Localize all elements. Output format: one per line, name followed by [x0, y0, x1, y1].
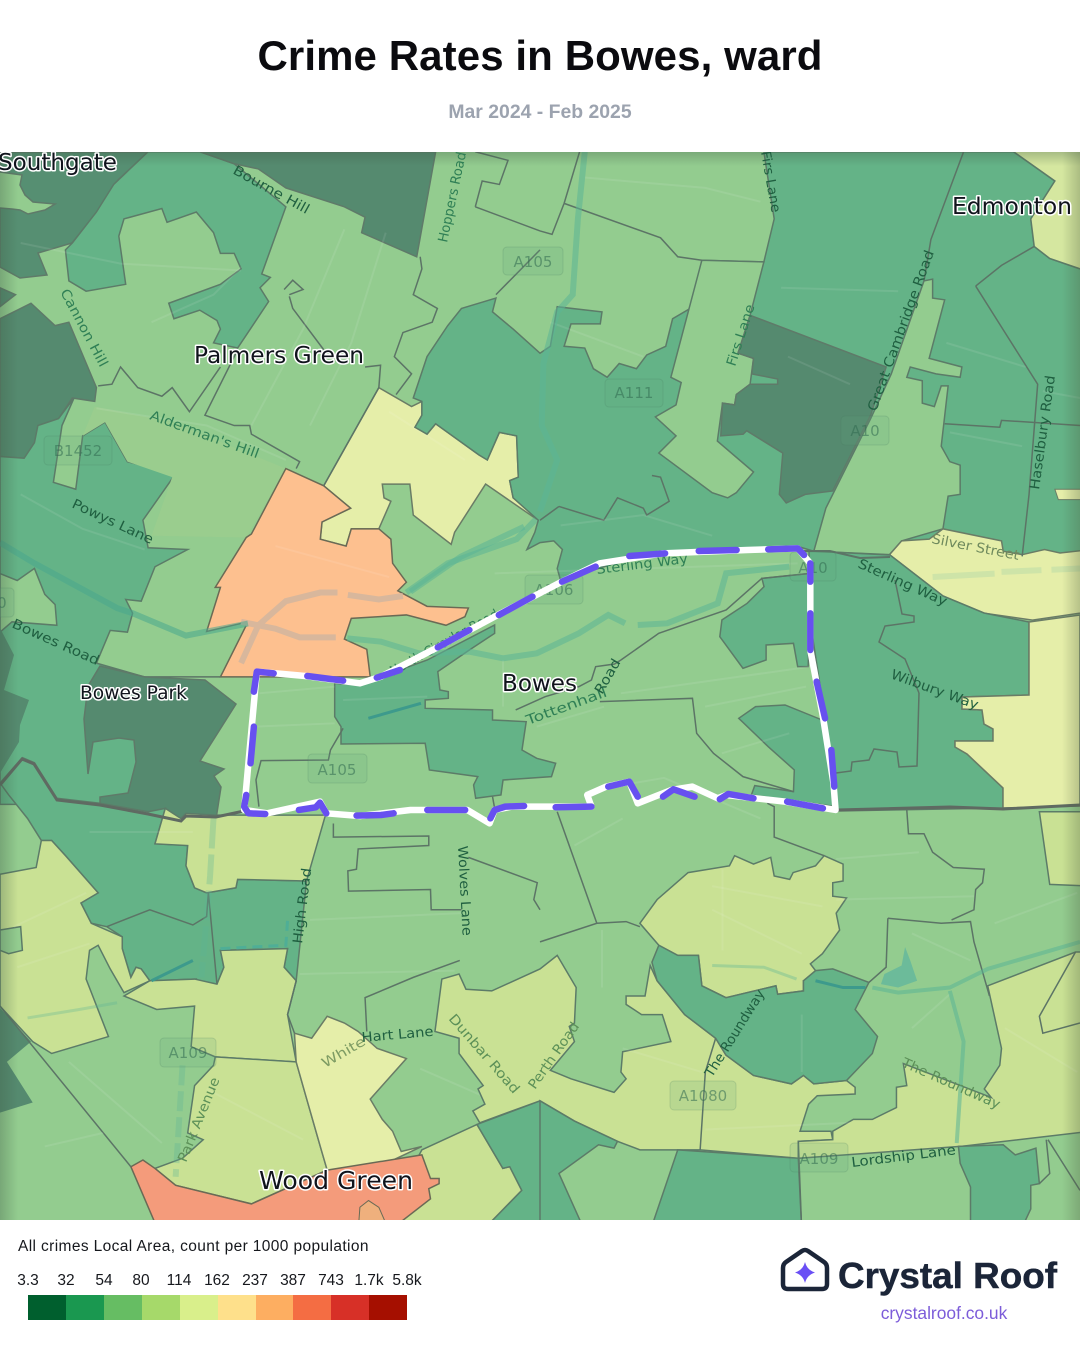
road shields [0, 247, 889, 1172]
road names: Wolves Lane [454, 845, 475, 936]
road names: Road [592, 656, 624, 697]
title: Crime Rates in Bowes, ward [257, 32, 823, 79]
borough boundary line [0, 551, 1080, 821]
place names [0, 150, 1072, 1195]
place names: Edmonton [952, 194, 1072, 220]
dark area: Southgate [0, 152, 148, 278]
dark area: Bowes Park [0, 628, 236, 821]
area polygons: south-west section [0, 758, 551, 1231]
legend colour scale: 32 [57, 1272, 75, 1289]
road shields: A10 [798, 559, 828, 577]
legend colour scale: 1.7k [354, 1272, 384, 1289]
area: east of ward [809, 551, 1080, 811]
subtitle: date range: Mar 2024 - Feb 2025 [448, 101, 632, 123]
area polygons: south-east section [435, 778, 1080, 1231]
legend colour scale: 114 [167, 1272, 192, 1289]
road shields: A10 [850, 422, 880, 440]
ward boundary: white base line [244, 548, 836, 823]
legend colour scale: 5.8k [392, 1272, 422, 1289]
place names: Bowes Park [80, 682, 187, 704]
road names: Alderman's Hill [148, 408, 261, 462]
website link: crystalroof.co.uk [881, 1303, 1007, 1323]
road names: Haselbury Road [1027, 374, 1059, 491]
road names: Cannon Hill [56, 286, 111, 370]
legend colour scale: 3.3 [17, 1272, 39, 1289]
road names: The Roundway [701, 987, 768, 1081]
wordmark: Crystal Roof [838, 1255, 1058, 1296]
road shields: A105 [318, 761, 356, 779]
road names: Bowes Road [9, 616, 102, 669]
road shields: A109 [169, 1044, 207, 1062]
area polygons: north section [0, 152, 540, 804]
road names: High Road [290, 867, 315, 944]
road names: The Roundway [898, 1055, 1003, 1113]
road names: Tottenhall [523, 685, 609, 729]
choropleth map [0, 152, 1080, 1220]
legend colour scale: 237 [242, 1272, 268, 1289]
road names: Perth Road [525, 1019, 583, 1092]
area polygons: Bowes ward interior [255, 527, 836, 808]
road shields: A105 [514, 253, 552, 271]
road shields: A106 [535, 581, 573, 599]
place names: Bowes [502, 671, 577, 697]
road names: Park Avenue [175, 1075, 223, 1164]
road names: Powys Lane [69, 496, 156, 548]
area polygons: north-east section [413, 150, 1080, 620]
road names: Sterling Way [855, 556, 950, 610]
road names: White [319, 1034, 369, 1071]
road shields: A1080 [679, 1087, 727, 1105]
road names: Firs Lane [724, 302, 759, 368]
legend colour scale: 743 [318, 1272, 344, 1289]
legend colour scale: 162 [204, 1272, 230, 1289]
road shields: B1452 [54, 442, 102, 460]
road names: North Circular Road [387, 606, 502, 679]
place names: Wood Green [259, 1166, 413, 1195]
legend title: All crimes Local Area, count per 1000 population [18, 1238, 369, 1255]
road names: Silver Street [930, 531, 1021, 564]
legend colour scale: 80 [132, 1272, 150, 1289]
road shields: A109 [800, 1150, 838, 1168]
logo: Crystal Roof [780, 1248, 1058, 1296]
road names: Hart Lane [361, 1024, 434, 1046]
road names: Bourne Hill [230, 163, 312, 218]
road names: Dunbar Road [445, 1011, 523, 1097]
ward boundary: purple dashes [244, 548, 834, 818]
legend colour scale: 54 [95, 1272, 113, 1289]
edge vignette [0, 152, 1080, 1220]
road names: Wilbury Way [889, 667, 981, 713]
road shields: A111 [615, 384, 653, 402]
icon: house with star [783, 1250, 827, 1289]
legend colour scale [17, 1272, 422, 1320]
road names: Sterling Way [596, 551, 689, 578]
place names: Palmers Green [194, 343, 364, 369]
road names [9, 150, 1059, 1171]
legend colour scale: 387 [280, 1272, 306, 1289]
road names: Lordship Lane [851, 1142, 957, 1171]
road names: Great Cambridge Road [865, 248, 938, 413]
